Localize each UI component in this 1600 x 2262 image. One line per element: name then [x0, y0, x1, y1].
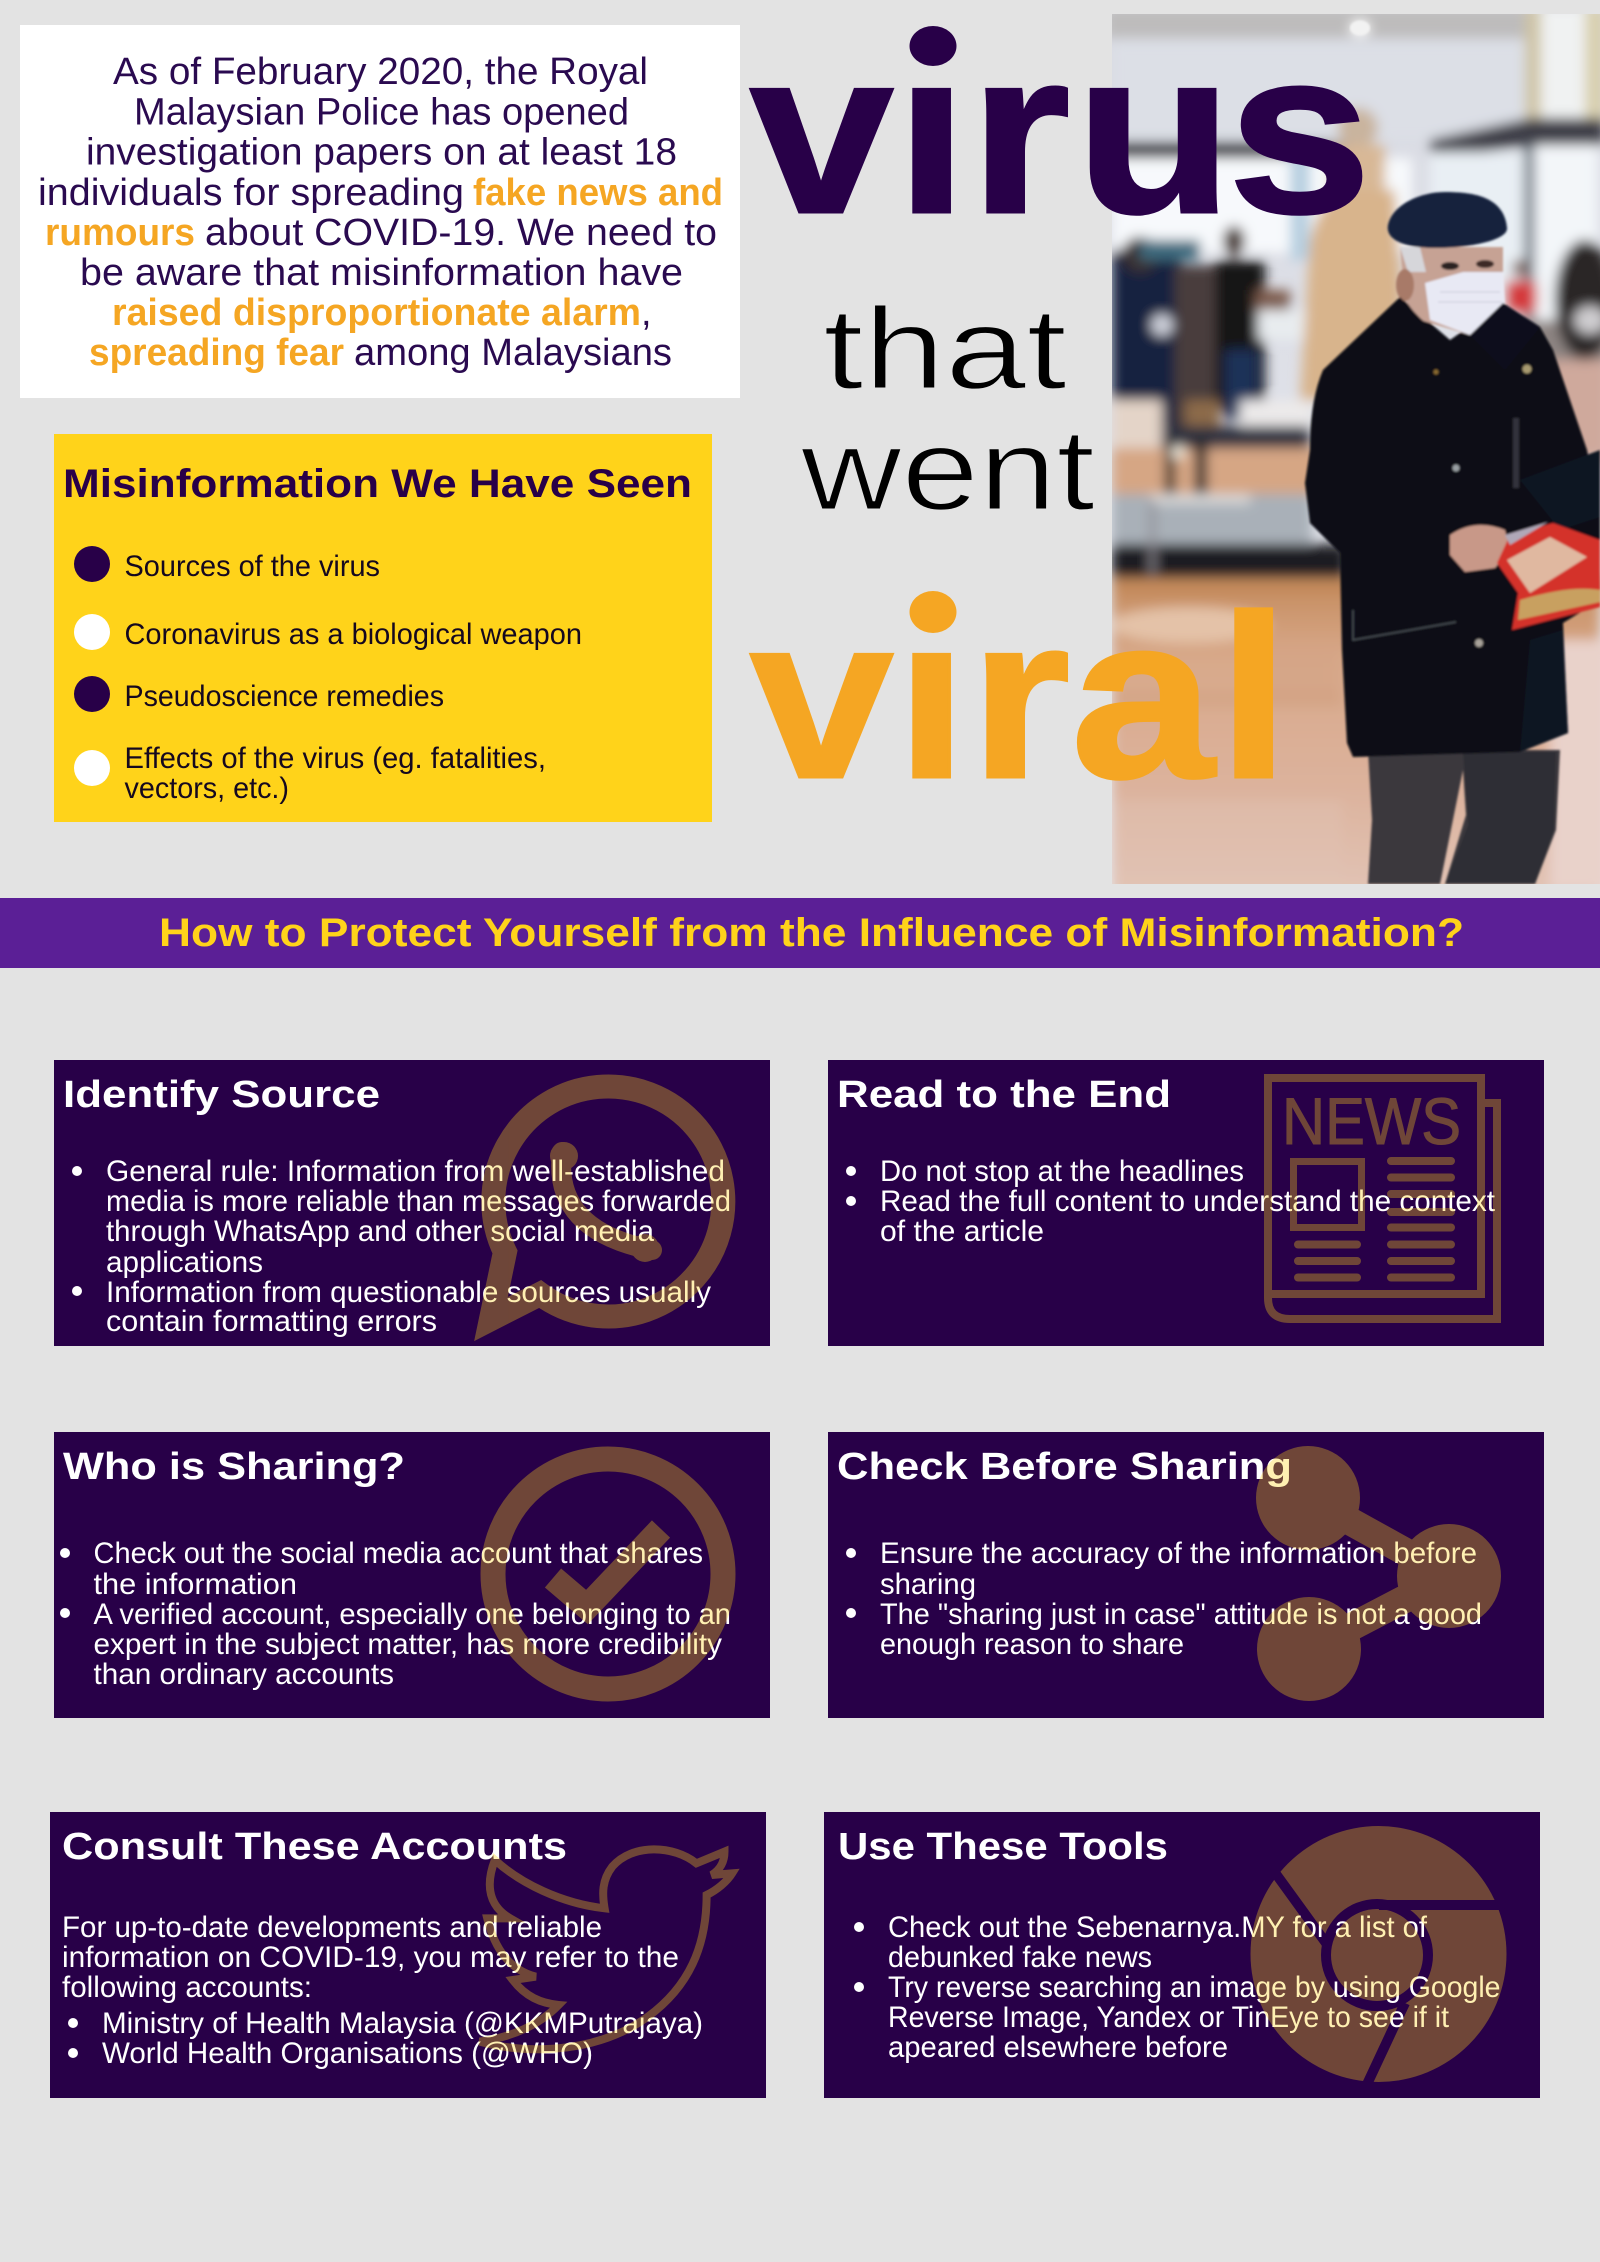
body list: Check out the social media account that shares — [94, 1537, 703, 1570]
body text and list — [62, 1911, 703, 2070]
body text and list: Ministry of Health Malaysia (@KKMPutrajaya) — [102, 2007, 703, 2040]
panel: misinformation we have seen — [54, 434, 712, 822]
list item: effects — [74, 742, 546, 805]
body text and list: following accounts: — [62, 1971, 312, 2004]
heading: Read to the End — [837, 1074, 1171, 1116]
list item: pseudoscience: Pseudoscience remedies — [124, 680, 444, 713]
body list: Reverse Image, Yandex or TinEye to see if it — [888, 2001, 1450, 2034]
body list: Information from questionable sources usually — [106, 1276, 711, 1309]
body list: Ensure the accuracy of the information before — [880, 1537, 1477, 1570]
body list — [846, 1155, 1496, 1248]
intro paragraph: As of February 2020, the Royal — [113, 51, 648, 93]
body list: A verified account, especially one belonging to an — [94, 1598, 731, 1631]
list item: sources: Sources of the virus — [124, 550, 380, 583]
heading: Identify Source — [63, 1074, 380, 1116]
intro paragraph: individuals for spreading — [38, 172, 464, 214]
panel: check before sharing — [828, 1432, 1544, 1718]
title: that: that — [823, 284, 1067, 414]
heading: Consult These Accounts — [62, 1826, 567, 1868]
panel: use these tools — [824, 1812, 1540, 2098]
body list: sharing — [880, 1568, 976, 1601]
body list: Read the full content to understand the context — [880, 1185, 1496, 1218]
list item: effects: vectors, etc.) — [124, 772, 289, 805]
intro paragraph: investigation papers on at least 18 — [86, 132, 677, 174]
banner: how to protect yourself — [0, 898, 1600, 968]
body text and list: For up-to-date developments and reliable — [62, 1911, 602, 1944]
icon: newspaper: NEWS — [1282, 1084, 1461, 1158]
panel: read to the end — [828, 1060, 1544, 1346]
icon: chrome logo — [1250, 1826, 1506, 2082]
body text and list: World Health Organisations (@WHO) — [102, 2037, 593, 2070]
body list — [854, 1911, 1500, 2064]
intro paragraph: rumours — [45, 212, 195, 254]
body list: expert in the subject matter, has more credibility — [94, 1628, 722, 1661]
heading: Who is Sharing? — [63, 1446, 405, 1488]
intro paragraph: , — [641, 292, 652, 334]
panel: consult these accounts — [50, 1812, 766, 2098]
icon: whatsapp — [491, 1086, 723, 1319]
heading: Check Before Sharing — [837, 1446, 1292, 1488]
body list — [72, 1155, 731, 1338]
icon: newspaper — [1268, 1078, 1497, 1319]
intro paragraph: raised disproportionate alarm — [112, 292, 641, 334]
body list: Do not stop at the headlines — [880, 1155, 1244, 1188]
title: virus: virus — [750, 2, 1371, 261]
body list: than ordinary accounts — [94, 1658, 394, 1691]
panel: intro text box — [20, 25, 740, 398]
list item: biological weapon: Coronavirus as a biological weapon — [124, 618, 582, 651]
body list: apeared elsewhere before — [888, 2031, 1228, 2064]
body list: Check out the Sebenarnya.MY for a list of — [888, 1911, 1428, 1944]
intro paragraph: among Malaysians — [354, 332, 672, 374]
body list: contain formatting errors — [106, 1305, 437, 1338]
ceiling light — [1350, 20, 1370, 36]
body list: debunked fake news — [888, 1941, 1152, 1974]
icon: verified check — [493, 1459, 723, 1689]
intro paragraph: Malaysian Police has opened — [134, 92, 629, 134]
body list — [60, 1537, 731, 1691]
photo: masked man in a museum — [1105, 8, 1600, 898]
list item: effects: Effects of the virus (eg. fatalities, — [124, 742, 546, 775]
title: went: went — [800, 404, 1095, 534]
body list: The "sharing just in case" attitude is not a good — [880, 1598, 1482, 1631]
intro paragraph: be aware that misinformation have — [80, 252, 683, 294]
body list: through WhatsApp and other social media — [106, 1215, 654, 1248]
panel: identify source — [54, 1060, 770, 1346]
intro paragraph — [38, 51, 723, 374]
title: viral: viral — [750, 567, 1290, 826]
body list: applications — [106, 1246, 263, 1279]
body list: of the article — [880, 1215, 1044, 1248]
body list — [846, 1537, 1482, 1661]
intro paragraph: spreading fear — [89, 332, 344, 374]
icon: share — [1256, 1446, 1501, 1701]
heading: Use These Tools — [838, 1826, 1168, 1868]
body list: the information — [94, 1568, 297, 1601]
icon: twitter bird — [480, 1849, 732, 2049]
body list: Try reverse searching an image by using Google — [888, 1971, 1500, 2004]
intro paragraph: about COVID-19. We need to — [205, 212, 717, 254]
body text and list: information on COVID-19, you may refer to the — [62, 1941, 679, 1974]
body list: General rule: Information from well-established — [106, 1155, 725, 1188]
panel heading: Misinformation We Have Seen — [63, 462, 692, 506]
intro paragraph: fake news and — [473, 172, 723, 214]
body list: enough reason to share — [880, 1628, 1184, 1661]
body list: media is more reliable than messages forwarded — [106, 1185, 731, 1218]
panel: who is sharing — [54, 1432, 770, 1718]
banner: how to protect yourself: How to Protect Yourself from the Influence of Misinformation? — [159, 911, 1464, 955]
